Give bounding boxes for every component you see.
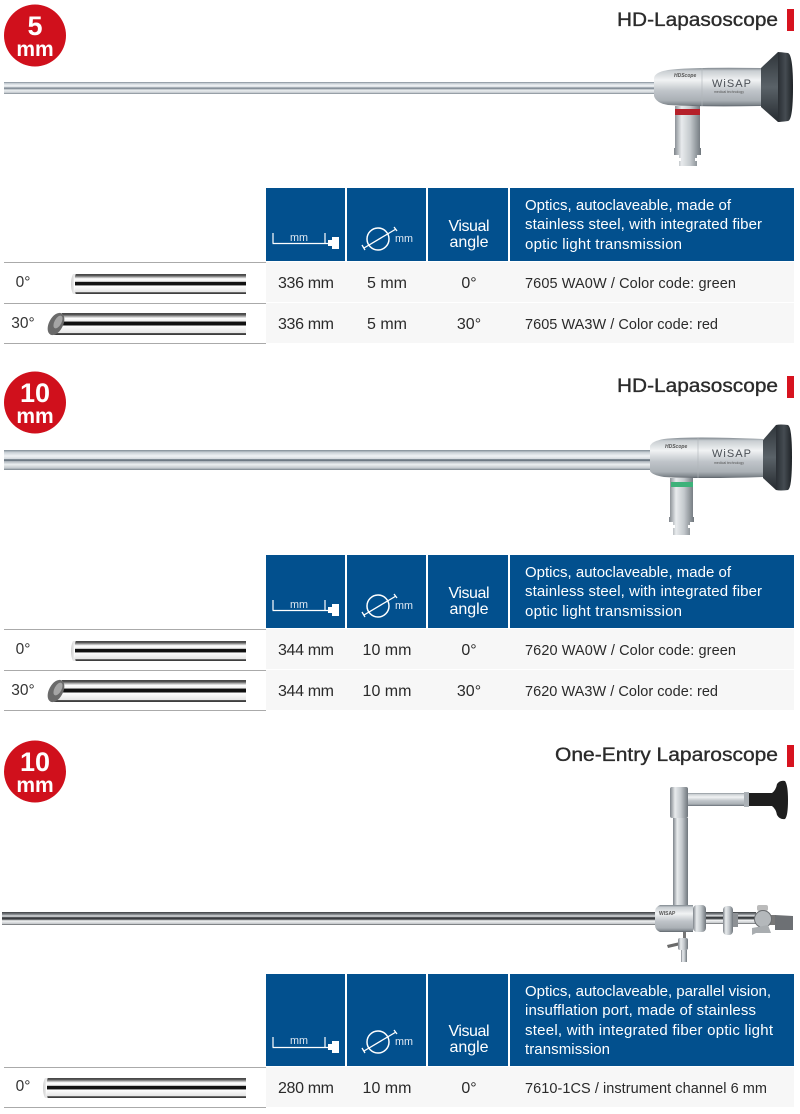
column header: description: transmission bbox=[525, 1041, 610, 1058]
column header: diameter icon bbox=[347, 555, 426, 628]
row: 0 degrees: 0° bbox=[16, 1078, 30, 1095]
row: 0 degrees: 0° bbox=[16, 641, 30, 658]
heading: HD-Lapasoscope: HD-Lapasoscope bbox=[617, 376, 778, 397]
column header: description: optic light transmission bbox=[525, 236, 682, 253]
row: 0 degrees: 0° bbox=[16, 274, 30, 291]
badge: 10 mm bbox=[4, 372, 66, 434]
column header: visual angle bbox=[428, 555, 508, 628]
column header: visual angle: angle bbox=[450, 601, 489, 618]
product image: 10 mm laparoscope: WiSAP bbox=[712, 448, 751, 460]
column header: description: steel, with integrated fiber optic light bbox=[525, 1022, 774, 1039]
row: 30 degrees: 7620 WA3W / Color code: red bbox=[525, 684, 718, 700]
row: 0 degrees: 7610-1CS / instrument channel 6 mm bbox=[525, 1081, 767, 1097]
column header: length icon bbox=[266, 974, 345, 1066]
row: 0 degrees: 336 mm bbox=[278, 275, 334, 292]
row: 30 degrees bbox=[4, 303, 794, 344]
column header: visual angle: Visual bbox=[448, 1023, 490, 1040]
badge: 5 mm: 5 bbox=[27, 11, 43, 41]
row: 30 degrees: 30° bbox=[457, 316, 481, 333]
row: 0 degrees bbox=[4, 629, 794, 669]
column header: description: optic light transmission bbox=[525, 603, 682, 620]
badge: 10 mm: mm bbox=[16, 405, 54, 428]
row: 0 degrees: 7605 WA0W / Color code: green bbox=[525, 276, 736, 292]
row: 30 degrees: 7605 WA3W / Color code: red bbox=[525, 317, 718, 333]
spec table bbox=[4, 188, 794, 344]
row: 0 degrees: 344 mm bbox=[278, 642, 334, 659]
row: 30 degrees: 344 mm bbox=[278, 683, 334, 700]
row: 0 degrees: 5 mm bbox=[367, 275, 407, 292]
spec table bbox=[4, 555, 794, 711]
column header: description: Optics, autoclaveable, parallel vision, bbox=[525, 983, 771, 1000]
row: 0 degrees: 10 mm bbox=[363, 1080, 411, 1097]
product image: 10 mm laparoscope bbox=[4, 424, 792, 535]
row: 0 degrees: 10 mm bbox=[363, 642, 411, 659]
row: 0 degrees: 0° bbox=[461, 1080, 477, 1097]
column header: visual angle: Visual bbox=[448, 585, 490, 602]
row: 0 degrees bbox=[4, 1067, 794, 1108]
column header: diameter icon bbox=[347, 188, 426, 261]
column header: description: Optics, autoclaveable, made of bbox=[525, 564, 732, 581]
heading: HD-Lapasoscope: HD-Lapasoscope bbox=[617, 10, 778, 31]
badge: 5 mm bbox=[4, 4, 66, 66]
product image: 10 mm laparoscope: medical technology bbox=[714, 461, 744, 465]
spec table bbox=[4, 974, 794, 1108]
column header: diameter icon bbox=[347, 974, 426, 1066]
section: 10 mm HD-Lapasoscope bbox=[4, 372, 794, 711]
row: 0 degrees bbox=[4, 262, 794, 302]
heading: One-Entry Laparoscope: One-Entry Laparoscope bbox=[555, 745, 778, 766]
column header: description: stainless steel, with integrated fiber bbox=[525, 216, 762, 233]
product image: 5 mm laparoscope: WiSAP bbox=[712, 78, 751, 90]
column header: visual angle: angle bbox=[450, 234, 489, 251]
column header: diameter icon: mm bbox=[395, 600, 413, 612]
column header: length icon: mm bbox=[290, 1035, 308, 1047]
section: 5 mm HD-Lapasoscope bbox=[4, 4, 794, 344]
row: 30 degrees: 10 mm bbox=[363, 683, 411, 700]
row: 30 degrees: 30° bbox=[11, 315, 35, 332]
column header: description: insufflation port, made of stainless bbox=[525, 1002, 756, 1019]
column header: description bbox=[510, 974, 794, 1066]
product image: 5 mm laparoscope: medical technology bbox=[714, 90, 744, 94]
column header: length icon: mm bbox=[290, 599, 308, 611]
column header: visual angle: Visual bbox=[448, 218, 490, 235]
product image: 5 mm laparoscope bbox=[4, 52, 793, 166]
row: 30 degrees bbox=[4, 670, 794, 711]
badge: 5 mm: mm bbox=[16, 38, 54, 61]
column header: description: stainless steel, with integrated fiber bbox=[525, 583, 762, 600]
column header: length icon bbox=[266, 188, 345, 261]
column header: diameter icon: mm bbox=[395, 233, 413, 245]
badge: 10 mm: mm bbox=[16, 774, 54, 797]
row: 30 degrees: 336 mm bbox=[278, 316, 334, 333]
column header: visual angle bbox=[428, 974, 508, 1066]
section: 10 mm One-Entry Laparoscope bbox=[2, 740, 794, 1108]
badge: 10 mm bbox=[4, 740, 66, 802]
column header: length icon: mm bbox=[290, 232, 308, 244]
badge: 10 mm: 10 bbox=[20, 378, 50, 408]
column header: description bbox=[510, 188, 794, 261]
row: 0 degrees: 280 mm bbox=[278, 1080, 334, 1097]
row: 30 degrees: 30° bbox=[11, 682, 35, 699]
badge: 10 mm: 10 bbox=[20, 747, 50, 777]
row: 30 degrees: 30° bbox=[457, 683, 481, 700]
row: 0 degrees: 7620 WA0W / Color code: green bbox=[525, 643, 736, 659]
row: 0 degrees: 0° bbox=[461, 642, 477, 659]
column header: length icon bbox=[266, 555, 345, 628]
column header: visual angle bbox=[428, 188, 508, 261]
column header: visual angle: angle bbox=[450, 1039, 489, 1056]
product image: one-entry laparoscope: WISAP bbox=[659, 911, 676, 917]
column header: description: Optics, autoclaveable, made of bbox=[525, 197, 732, 214]
product image: 5 mm laparoscope: HDScope bbox=[674, 73, 696, 79]
product image: 10 mm laparoscope: HDScope bbox=[665, 444, 687, 450]
column header: diameter icon: mm bbox=[395, 1036, 413, 1048]
column header: description bbox=[510, 555, 794, 628]
row: 30 degrees: 5 mm bbox=[367, 316, 407, 333]
row: 0 degrees: 0° bbox=[461, 275, 477, 292]
product image: one-entry laparoscope bbox=[2, 781, 793, 962]
